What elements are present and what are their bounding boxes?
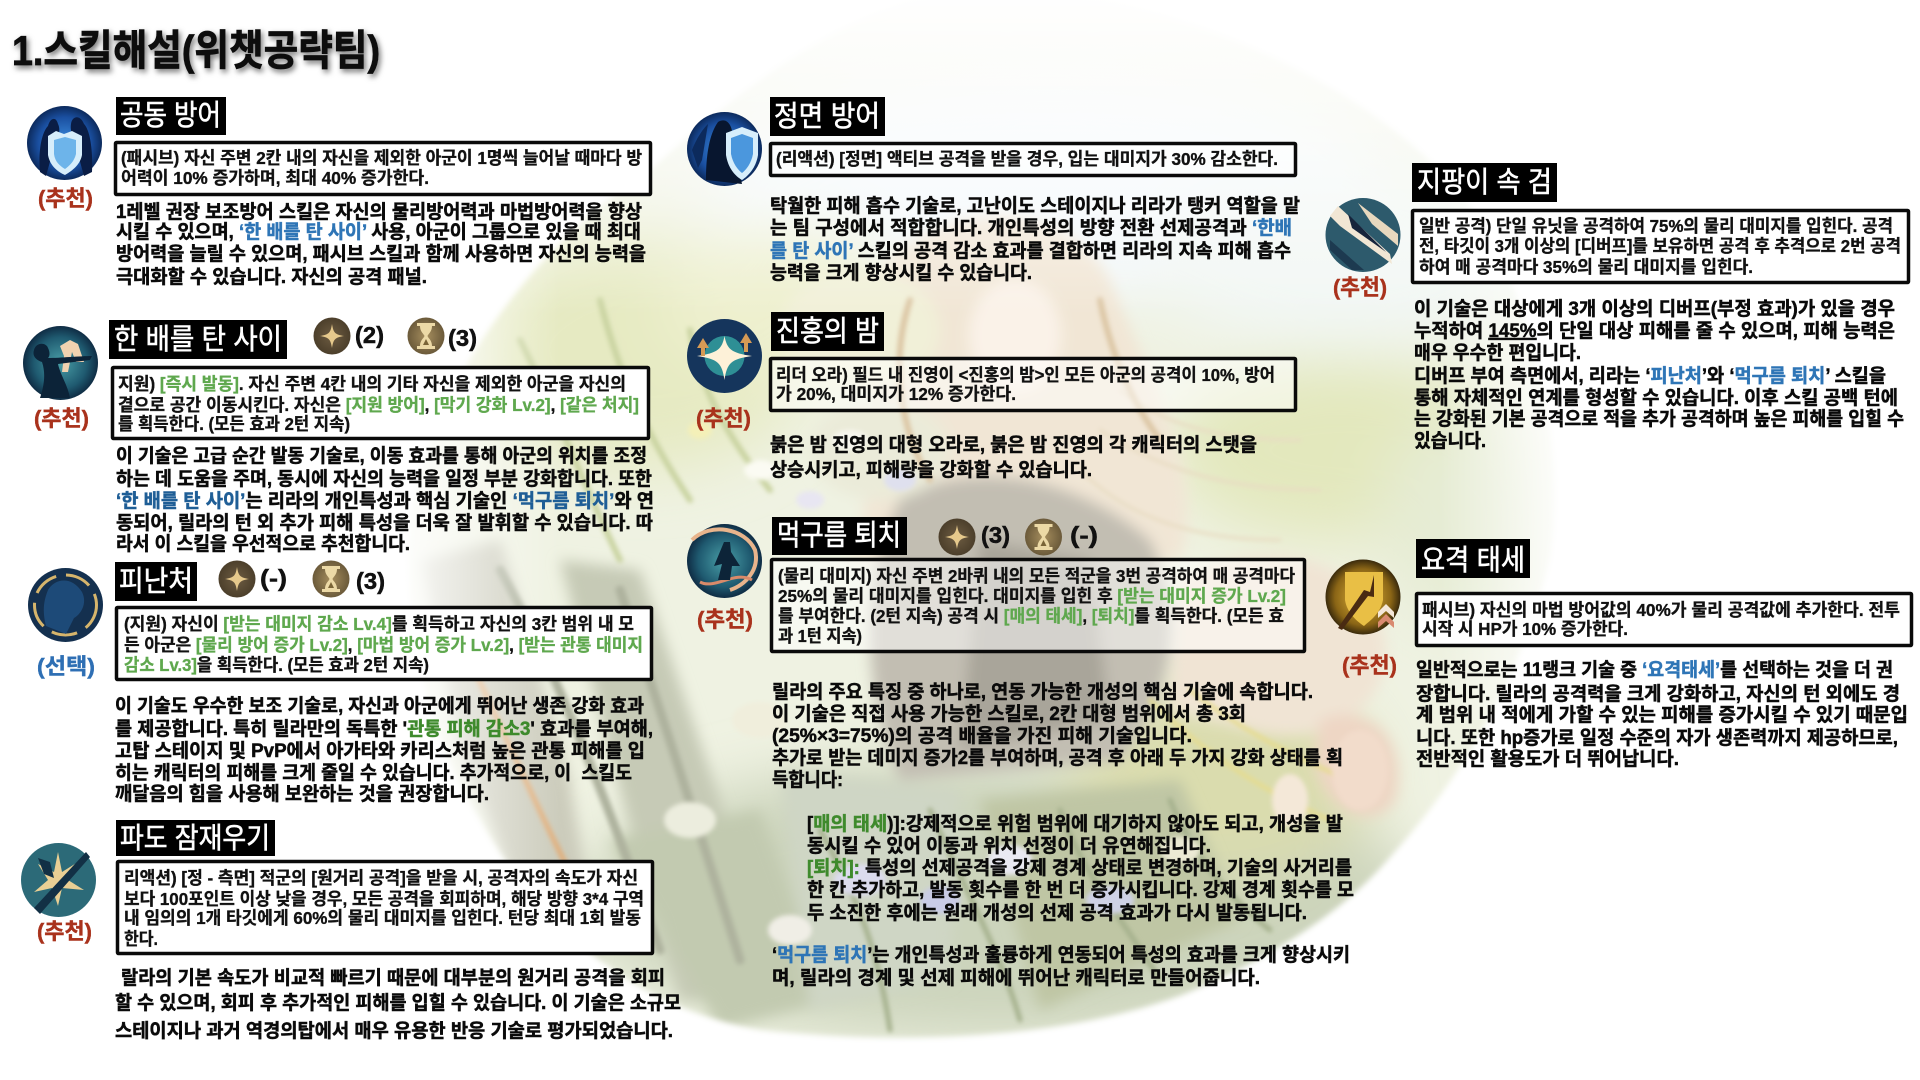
skill commentary	[116, 445, 654, 555]
icon: cloak in glowing ring	[28, 568, 103, 642]
skill effect box: 곁으로 공간 이동시킨다. 자신은 [지원 방어], [막기 강화 Lv.2], [같은 처지]	[118, 395, 639, 415]
panel: 피난처	[28, 560, 653, 805]
skill commentary: 는 강화된 기본 공격으로 적을 추가 공격하며 높은 피해를 입힐 수	[1414, 408, 1904, 430]
skill commentary: 1레벨 권장 보조방어 스킬은 자신의 물리방어력과 마법방어력을 향상	[116, 201, 642, 223]
skill commentary	[772, 681, 1343, 791]
skill effect box: 를 부여한다. (2턴 지속) 공격 시 [매의 태세], [퇴치]를 획득한다. (모든 효	[778, 606, 1284, 626]
skill commentary: 누적하여 145%의 단일 대상 피해를 줄 수 있으며, 피해 능력은	[1414, 320, 1895, 342]
cooldown value: (-)	[1070, 522, 1098, 548]
skill commentary: 스테이지나 과거 역경의탑에서 매우 유용한 반응 기술로 평가되었습니다.	[115, 1020, 673, 1042]
skill commentary: 히는 캐릭터의 피해를 크게 줄일 수 있습니다. 추가적으로, 이 스킬도	[115, 762, 632, 784]
panel: 정면 방어	[687, 97, 1300, 284]
recommendation label: (추천)	[696, 406, 751, 431]
skill commentary: 디버프 부여 측면에서, 리라는 ‘피난처’와 ‘먹구름 퇴치’ 스킬을	[1414, 365, 1886, 387]
icon: knight with shield	[687, 112, 762, 186]
enhancement state explanations	[807, 813, 1354, 924]
enhancement state explanations: 동시킬 수 있어 이동과 위치 선정이 더 유연해집니다.	[807, 835, 1211, 857]
icon: silhouette with figure	[23, 326, 98, 400]
icon: cooldown coin	[1025, 518, 1062, 556]
skill effect box	[1412, 210, 1908, 282]
skill effect box: (리액션) [정면] 액티브 공격을 받을 경우, 입는 대미지가 30% 감소한다.	[776, 149, 1278, 169]
skill commentary: 이 기술은 고급 순간 발동 기술로, 이동 효과를 통해 아군의 위치를 조정	[116, 445, 647, 467]
skill commentary: 매우 우수한 편입니다.	[1414, 342, 1581, 364]
skill heading: 한 배를 탄 사이	[114, 324, 282, 356]
skill effect box: 하여 매 공격마다 35%의 물리 대미지를 입힌다.	[1419, 257, 1753, 277]
skill commentary: 고탑 스테이지 및 PvP에서 아가타와 카리스처럼 높은 관통 피해를 입	[115, 740, 645, 762]
skill effect box: 든 아군은 [물리 방어 증가 Lv.2], [마법 방어 증가 Lv.2], [받는 관통 대미지	[124, 635, 643, 655]
icon: energy cost coin	[218, 560, 256, 598]
skill commentary	[115, 695, 653, 805]
skill commentary: 일반적으로는 11랭크 기술 중 ‘요격태세’를 선택하는 것을 더 권	[1416, 659, 1893, 681]
skill commentary: 하는 데 도움을 주며, 동시에 자신의 능력을 일정 부분 강화합니다. 또한	[116, 468, 652, 490]
recommendation label: (추천)	[697, 607, 753, 632]
enhancement state explanations: 한 칸 추가하고, 발동 횟수를 한 번 더 증가시킵니다. 강제 경계 횟수를 모	[807, 879, 1354, 901]
skill effect box: 를 획득한다. (모든 효과 2턴 지속)	[118, 414, 350, 434]
skill commentary	[116, 201, 646, 288]
skill effect box: 일반 공격) 단일 유닛을 공격하여 75%의 물리 대미지를 입힌다. 공격	[1419, 216, 1893, 236]
skill effect box: 패시브) 자신의 마법 방어값의 40%가 물리 공격값에 추가한다. 전투	[1422, 600, 1900, 620]
skill heading: 요격 태세	[1421, 545, 1525, 577]
recommendation label: (추천)	[34, 406, 89, 431]
skill effect box	[772, 560, 1304, 652]
skill commentary: 추가로 받는 데미지 증가2를 부여하며, 공격 후 아래 두 가지 강화 상태를 획	[772, 747, 1343, 769]
icon: sword slashes	[1326, 198, 1400, 272]
recommendation label: (추천)	[37, 919, 92, 944]
skill commentary: 를 제공합니다. 특히 릴라만의 독특한 '관통 피해 감소3' 효과를 부여해,	[115, 718, 653, 740]
skill effect box: 리더 오라) 필드 내 진영이 <진홍의 밤>인 모든 아군의 공격이 10%, 방어	[776, 365, 1275, 385]
skill commentary	[1416, 659, 1908, 770]
skill commentary: 이 기술도 우수한 보조 기술로, 자신과 아군에게 뛰어난 생존 강화 효과	[115, 695, 644, 717]
icon: cooldown coin	[408, 318, 444, 354]
skill commentary: 통해 자체적인 연계를 형성할 수 있습니다. 이후 스킬 공백 턴에	[1414, 387, 1898, 409]
skill heading: 지팡이 속 검	[1417, 166, 1552, 199]
skill heading: 피난처	[119, 566, 193, 598]
skill effect box: 가 20%, 대미지가 12% 증가한다.	[776, 384, 1016, 404]
recommendation label: (추천)	[1333, 275, 1387, 300]
skill effect box: 어력이 10% 증가하며, 최대 40% 증가한다.	[121, 168, 429, 188]
skill commentary: 동되어, 릴라의 턴 외 추가 피해 특성을 더욱 잘 발휘할 수 있습니다. 따	[116, 512, 653, 534]
skill effect box	[116, 142, 650, 194]
skill effect box: 보다 100포인트 이상 낮을 경우, 모든 공격을 회피하며, 해당 방향 3*4 구역	[124, 889, 644, 909]
panel: 요격 태세	[1326, 539, 1912, 770]
icon: cooldown coin	[312, 560, 350, 598]
energy cost value: (2)	[355, 322, 384, 348]
skill commentary: 상승시키고, 피해량을 강화할 수 있습니다.	[770, 459, 1092, 481]
skill effect box: (패시브) 자신 주변 2칸 내의 자신을 제외한 아군이 1명씩 늘어날 때마다 방	[121, 148, 642, 168]
skill effect box: 감소 Lv.3]을 획득한다. (모든 효과 2턴 지속)	[124, 655, 429, 675]
skill effect box	[112, 368, 648, 438]
icon: crossed spear and burst	[21, 843, 96, 917]
skill effect box	[118, 862, 652, 954]
skill commentary: 를 탄 사이’ 스킬의 공격 감소 효과를 결합하면 리라의 지속 피해 흡수	[770, 240, 1291, 262]
skill effect box	[1416, 594, 1912, 646]
closing remark	[772, 944, 1350, 989]
skill commentary: 계 범위 내 적에게 가할 수 있는 피해를 증가시킬 수 있기 때문입	[1416, 704, 1908, 726]
panel: 공동 방어	[27, 97, 650, 288]
skill commentary	[770, 434, 1257, 481]
panel: 지팡이 속 검	[1326, 163, 1908, 452]
skill heading: 진홍의 밤	[776, 315, 879, 348]
skill commentary: 는 팀 구성에서 적합합니다. 개인특성의 방향 전환 선제공격과 ‘한배	[770, 217, 1292, 239]
skill commentary: 장합니다. 릴라의 공격력을 크게 강화하고, 자신의 턴 외에도 경	[1416, 683, 1900, 705]
cooldown value: (3)	[448, 325, 477, 351]
skill effect box: 내 임의의 1개 타깃에게 60%의 물리 대미지를 입힌다. 턴당 최대 1회 발동	[124, 908, 641, 928]
skill commentary	[115, 967, 681, 1042]
skill effect box: 시작 시 HP가 10% 증가한다.	[1422, 619, 1628, 639]
enhancement state explanations: [퇴치]: 특성의 선제공격을 강제 경계 상태로 변경하며, 기술의 사거리를	[807, 857, 1352, 879]
choice label: (선택)	[37, 654, 95, 679]
energy cost value: (3)	[981, 522, 1010, 548]
icon: dancer in ribbon	[687, 524, 762, 598]
icon: golden spear and shield	[1326, 560, 1400, 634]
closing remark: 며, 릴라의 경계 및 선제 피해에 뛰어난 캐릭터로 만들어줍니다.	[772, 967, 1260, 989]
panel: 먹구름 퇴치	[687, 517, 1354, 989]
skill commentary: 능력을 크게 향상시킬 수 있습니다.	[770, 262, 1032, 284]
foliage and flower detail	[450, 300, 1350, 1030]
skill effect box: 한다.	[124, 929, 158, 949]
enhancement state explanations: 두 소진한 후에는 원래 개성의 선제 공격 효과가 다시 발동됩니다.	[807, 902, 1307, 924]
skill commentary: 전반적인 활용도가 더 뛰어납니다.	[1416, 748, 1679, 770]
skill heading: 공동 방어	[120, 100, 221, 132]
skill commentary: 이 기술은 대상에게 3개 이상의 디버프(부정 효과)가 있을 경우	[1414, 298, 1895, 320]
skill commentary: 라서 이 스킬을 우선적으로 추천합니다.	[116, 533, 410, 555]
icon: glowing star with arrows	[687, 319, 762, 393]
skill commentary: 득합니다:	[772, 769, 843, 791]
skill effect box: 과 1턴 지속)	[778, 626, 862, 646]
title: 1.스킬해설(위챗공략팀)	[12, 27, 380, 74]
skill commentary: 시킬 수 있으며, ‘한 배를 탄 사이’ 사용, 아군이 그룹으로 있을 때 최대	[116, 221, 641, 243]
panel: 한 배를 탄 사이	[23, 318, 654, 555]
skill effect box: (물리 대미지) 자신 주변 2바퀴 내의 모든 적군을 3번 공격하여 매 공격마다	[778, 566, 1295, 586]
cooldown value: (3)	[356, 568, 385, 594]
skill commentary: 릴라의 주요 특징 중 하나로, 연동 가능한 개성의 핵심 기술에 속합니다.	[772, 681, 1313, 703]
skill commentary: 할 수 있으며, 회피 후 추가적인 피해를 입힐 수 있습니다. 이 기술은 소규모	[115, 992, 681, 1014]
skill heading: 먹구름 퇴치	[777, 520, 901, 552]
skill commentary: 극대화할 수 있습니다. 자신의 공격 패널.	[116, 266, 427, 288]
skill effect box: 지원) [즉시 발동]. 자신 주변 4칸 내의 기타 자신을 제외한 아군을 자신의	[118, 374, 626, 394]
panel: 파도 잠재우기	[21, 820, 681, 1042]
skill effect box: 25%의 물리 대미지를 입힌다. 대미지를 입힌 후 [받는 대미지 증가 Lv.2]	[778, 586, 1286, 606]
skill commentary: 이 기술은 직접 사용 가능한 스킬로, 2칸 대형 범위에서 총 3회	[772, 703, 1246, 725]
skill commentary: 랄라의 기본 속도가 비교적 빠르기 때문에 대부분의 원거리 공격을 회피	[121, 967, 665, 989]
skill commentary: 니다. 또한 hp증가로 일정 수준의 자가 생존력까지 제공하므로,	[1416, 727, 1898, 749]
background illustration: faded girl among flowers	[418, 106, 1548, 1040]
icon: two figures with shield	[27, 106, 102, 180]
skill commentary: 있습니다.	[1414, 430, 1486, 452]
enhancement state explanations: [매의 태세)]:강제적으로 위험 범위에 대기하지 않아도 되고, 개성을 발	[807, 813, 1343, 835]
skill effect box: 리액션) [정 - 측면] 적군의 [원거리 공격]을 받을 시, 공격자의 속도가 자신	[124, 868, 638, 888]
skill heading: 파도 잠재우기	[120, 823, 270, 855]
skill commentary: 방어력을 늘릴 수 있으며, 패시브 스킬과 함께 사용하면 자신의 능력을	[116, 243, 646, 265]
recommendation label: (추천)	[1342, 653, 1397, 678]
skill commentary	[770, 195, 1300, 284]
skill commentary	[1414, 298, 1904, 452]
skill commentary: 깨달음의 힘을 사용해 보완하는 것을 권장합니다.	[115, 783, 489, 805]
panel: 진홍의 밤	[687, 312, 1296, 481]
closing remark: ‘먹구름 퇴치’는 개인특성과 훌륭하게 연동되어 특성의 효과를 크게 향상시키	[772, 944, 1350, 966]
skill effect box: 전, 타깃이 3개 이상의 [디버프]를 보유하면 공격 후 추격으로 2번 공격	[1419, 236, 1901, 256]
skill commentary: 탁월한 피해 흡수 기술로, 고난이도 스테이지나 리라가 탱커 역할을 맡	[770, 195, 1300, 217]
recommendation label: (추천)	[38, 186, 93, 211]
skill commentary: 붉은 밤 진영의 대형 오라로, 붉은 밤 진영의 각 캐릭터의 스탯을	[770, 434, 1257, 456]
skill commentary: (25%×3=75%)의 공격 배율을 가진 피해 기술입니다.	[772, 725, 1192, 747]
skill commentary: ‘한 배를 탄 사이’는 리라의 개인특성과 핵심 기술인 ‘먹구름 퇴치’와 연	[116, 490, 654, 512]
energy cost value: (-)	[260, 565, 287, 591]
skill effect box: (지원) 자신이 [받는 대미지 감소 Lv.4]를 획득하고 자신의 3칸 범위 내 모	[124, 614, 634, 634]
skill effect box	[116, 608, 652, 680]
icon: energy cost coin	[314, 318, 350, 354]
skill heading: 정면 방어	[774, 100, 880, 133]
skill effect box	[770, 358, 1296, 410]
icon: energy cost coin	[938, 518, 976, 556]
skill effect box	[770, 144, 1296, 176]
